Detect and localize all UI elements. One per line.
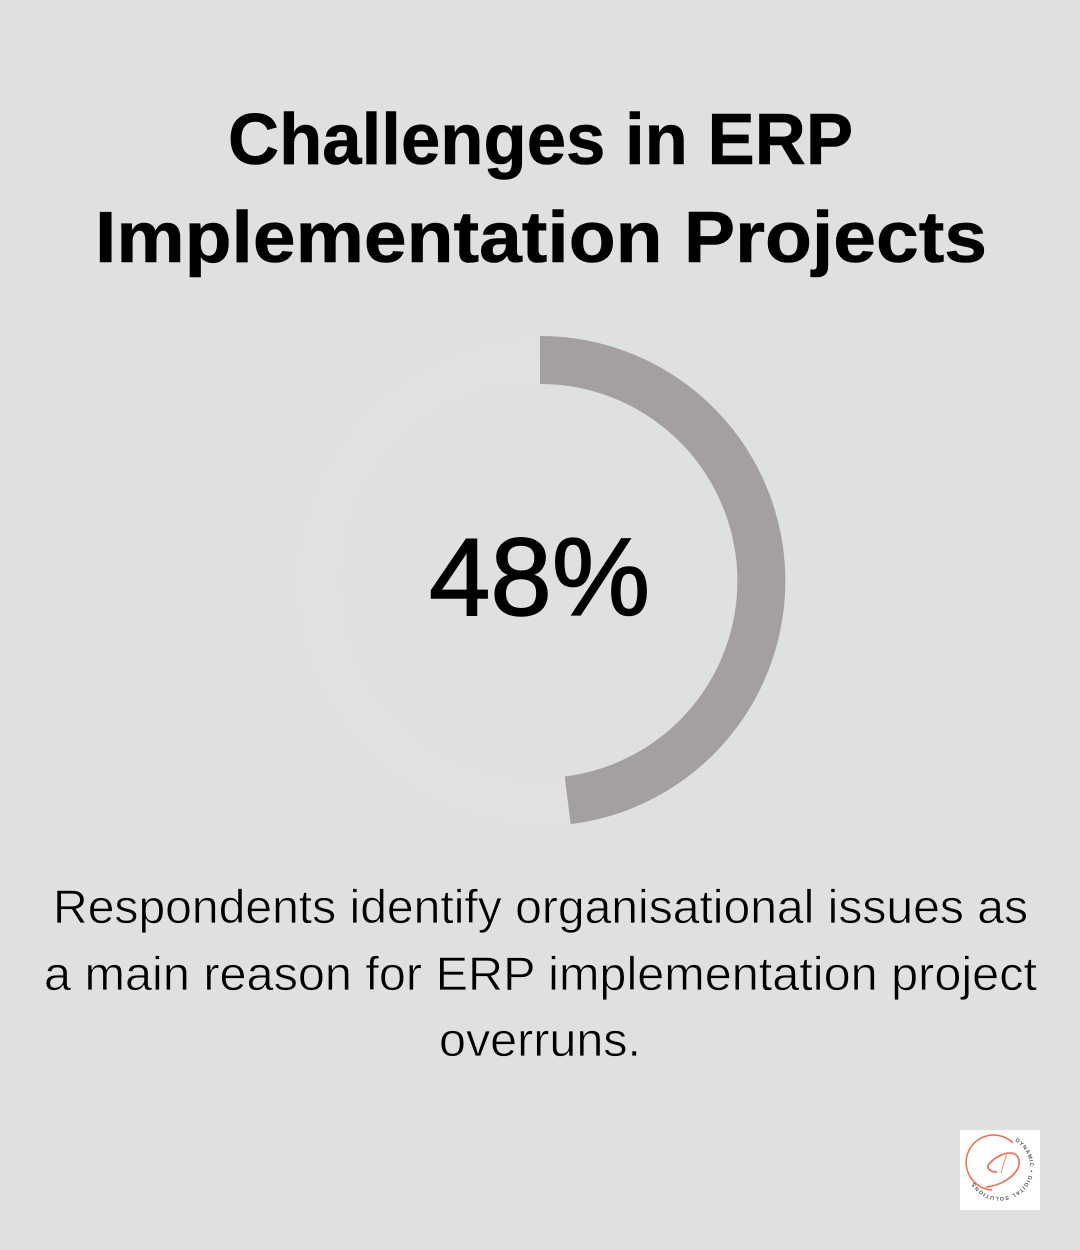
title: Implementation Projects [95, 198, 987, 278]
logo: Dynamic Digital Solutions: DYNAMIC • DIGITAL SOLUTIONS [972, 1138, 1034, 1201]
logo: Dynamic Digital Solutions [960, 1130, 1040, 1210]
percentage value: 48% [429, 516, 650, 639]
description text [44, 880, 1037, 1066]
description text: Respondents identify organisational issues as [53, 880, 1028, 933]
description text: overruns. [439, 1013, 641, 1066]
title [95, 100, 987, 278]
description text: a main reason for ERP implementation project [44, 947, 1037, 1000]
title: Challenges in ERP [228, 100, 853, 180]
donut chart: 48% [319, 360, 761, 802]
